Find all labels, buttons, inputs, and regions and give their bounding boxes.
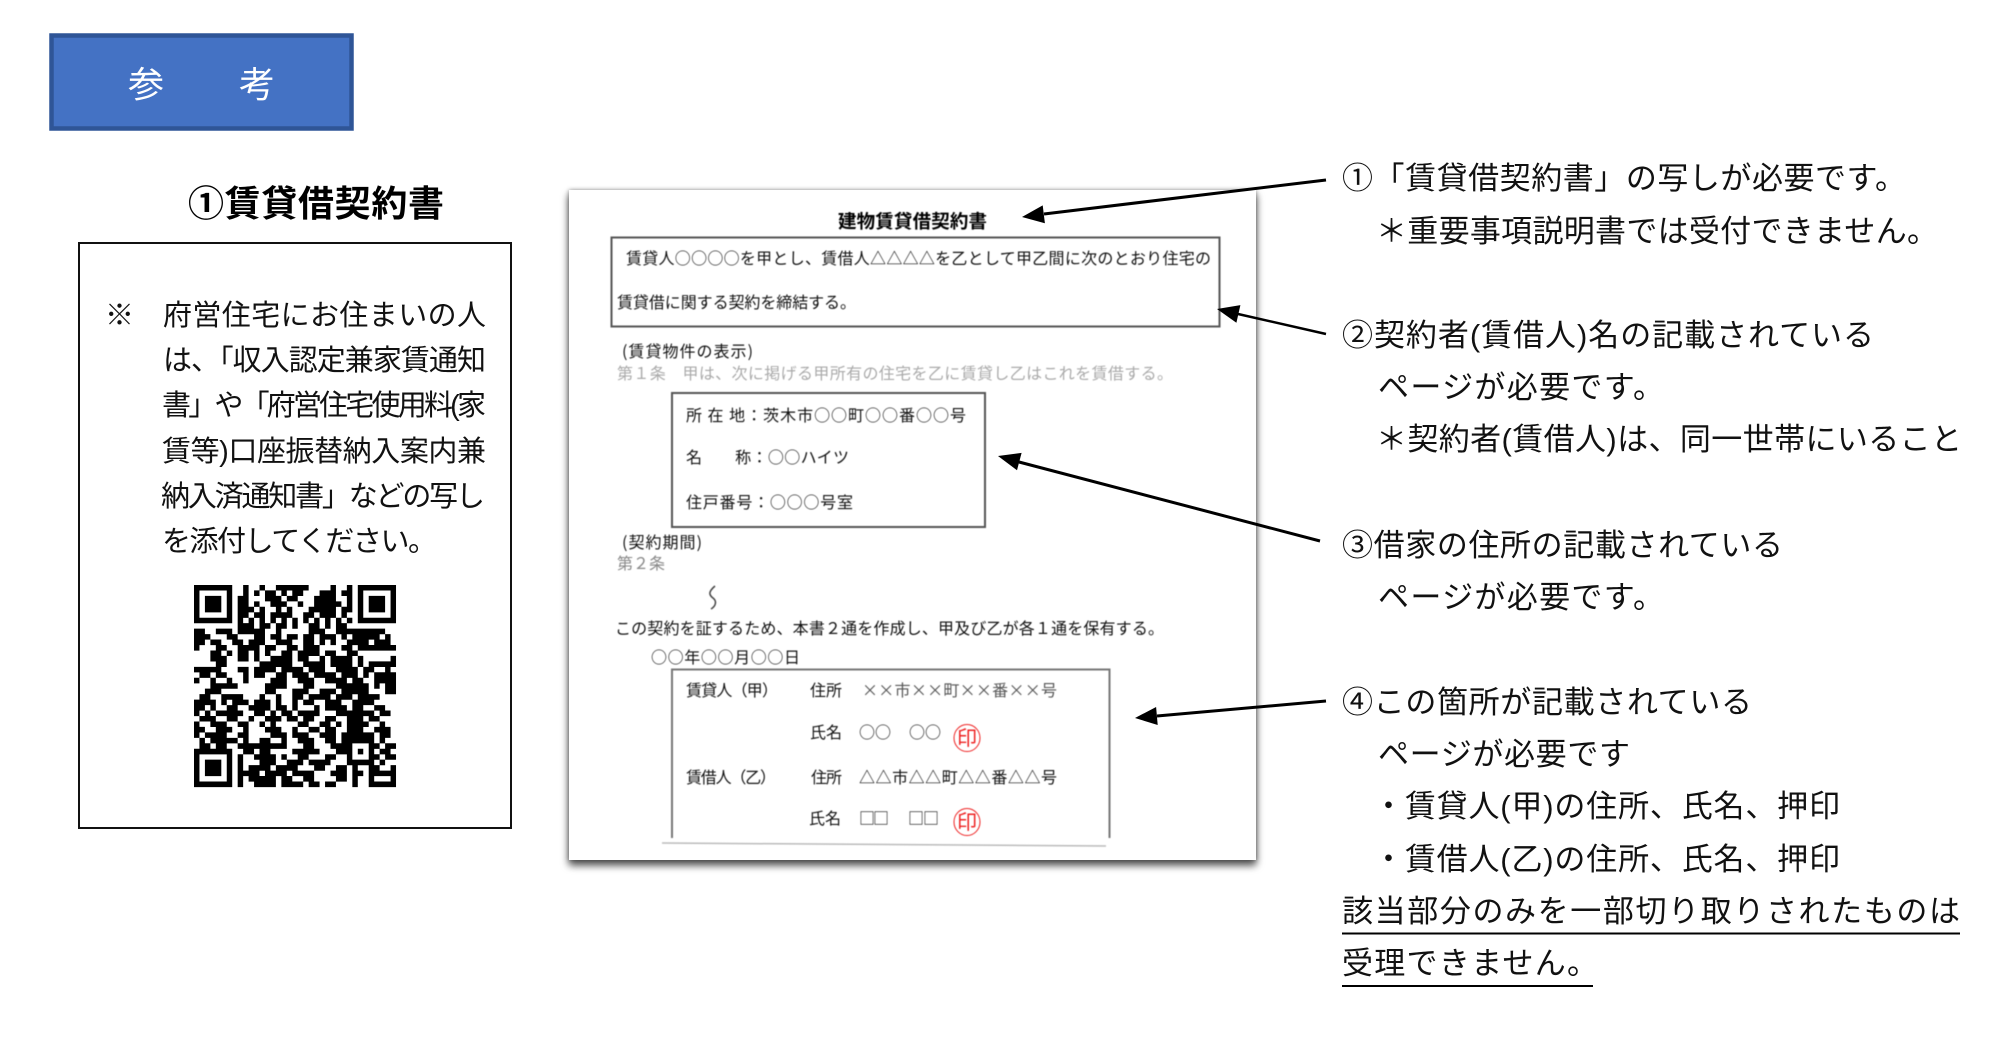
document box: signatures: □□ — [908, 805, 939, 829]
document article 1 — [617, 338, 1173, 384]
document box: signatures: 氏名 — [810, 719, 842, 743]
document box: parties clause: 賃貸借に関する契約を締結する。 — [617, 289, 856, 313]
document box: parties clause — [612, 238, 1220, 326]
document box: signatures: ○○ — [859, 719, 891, 743]
arrow 4 — [1135, 701, 1326, 725]
note text: 府営住宅にお住まいの人 — [163, 299, 486, 332]
callout 3: page with rental address: ページが必要です。 — [1378, 580, 1664, 615]
document box: signatures — [662, 670, 1110, 846]
callout 2: page with contractor name: ＊契約者(賃借人)は、同一世帯にいること — [1376, 422, 1962, 457]
underlined warning — [1342, 894, 1960, 986]
callout 2: page with contractor name: ②契約者(賃借人)名の記載されている — [1342, 318, 1874, 353]
note text: を添付してください。 — [162, 525, 437, 558]
document article 2: (契約期間) — [622, 529, 702, 553]
seal 1: 印 — [957, 722, 977, 751]
callout 1: lease contract copy required: ①「賃貸借契約書」の写しが必要です。 — [1342, 161, 1906, 196]
arrow 2 — [1217, 305, 1326, 334]
note text — [105, 299, 486, 558]
callout 4: page with this section: ページが必要です — [1378, 737, 1630, 772]
badge: 参考 heading — [52, 36, 352, 128]
QR code — [194, 588, 396, 784]
document box: property details: 所 在 地：茨木市○○町○○番○○号 — [686, 402, 966, 426]
callout 4: page with this section — [1342, 685, 1840, 877]
document box: property details: 名 称：○○ハイツ — [686, 444, 849, 468]
badge: 参考 heading: 考 — [239, 64, 275, 105]
document box: signatures: △△市△△町△△番△△号 — [859, 764, 1057, 788]
panel: note with QR code — [79, 243, 511, 828]
document box: signatures: □□ — [859, 805, 889, 829]
document title: 建物賃貸借契約書 — [838, 208, 987, 234]
note text: 書」や「府営住宅使用料(家 — [162, 389, 486, 422]
callout 1: lease contract copy required — [1342, 161, 1938, 249]
document box: signatures: 賃借人（乙） — [686, 764, 776, 788]
document box: signatures: 賃貸人（甲） — [686, 677, 778, 701]
document box: signatures: ××市××町××番××号 — [862, 677, 1057, 701]
seal 2: 印 — [957, 806, 977, 835]
document box: signatures: 氏名 — [809, 805, 841, 829]
document box: property details: 住戸番号：○○○号室 — [686, 489, 853, 513]
document article 2: ○○年○○月○○日 — [651, 644, 800, 668]
document article 2: 第２条 — [617, 550, 665, 574]
callout 2: page with contractor name — [1342, 318, 1962, 457]
document article 2: この契約を証するため、本書２通を作成し、甲及び乙が各１通を保有する。 — [615, 615, 1164, 639]
note text: 納入済通知書」などの写し — [161, 480, 485, 513]
document box: signatures: ○○ — [909, 719, 941, 743]
callout 3: page with rental address — [1342, 528, 1783, 615]
underlined warning: 受理できません。 — [1342, 946, 1598, 981]
callout 4: page with this section: ・賃借人(乙)の住所、氏名、押印 — [1373, 842, 1840, 877]
heading: 賃貸借契約書: ①賃貸借契約書 — [188, 183, 444, 224]
callout 1: lease contract copy required: ＊重要事項説明書では受付できません。 — [1376, 214, 1938, 249]
document article 2 — [615, 529, 1164, 668]
document page — [569, 190, 1256, 860]
document box: property details — [672, 393, 985, 527]
note text: は、「収入認定兼家賃通知 — [163, 344, 486, 377]
callout 4: page with this section: ④この箇所が記載されている — [1342, 685, 1752, 720]
callout 3: page with rental address: ③借家の住所の記載されている — [1342, 528, 1783, 563]
badge: 参考 heading: 参 — [128, 64, 164, 105]
document box: signatures: 住所 — [810, 677, 842, 701]
arrow 1 — [1022, 180, 1326, 223]
callout 2: page with contractor name: ページが必要です。 — [1378, 370, 1664, 405]
document box: parties clause: 賃貸人○○○○を甲とし、賃借人△△△△を乙として甲乙間に次のとおり住宅の — [626, 245, 1211, 269]
note text: ※ — [105, 300, 134, 332]
callout 4: page with this section: ・賃貸人(甲)の住所、氏名、押印 — [1373, 789, 1840, 824]
document box: signatures: 住所 — [811, 764, 842, 788]
document article 1: 第１条 甲は、次に掲げる甲所有の住宅を乙に賃貸し乙はこれを賃借する。 — [617, 360, 1173, 384]
document article 1: (賃貸物件の表示) — [622, 338, 753, 362]
panel: sample lease contract document — [569, 190, 1256, 860]
note text: 賃等)口座振替納入案内兼 — [162, 435, 486, 468]
arrow 3 — [998, 453, 1320, 541]
document contents — [612, 208, 1220, 846]
underlined warning: 該当部分のみを一部切り取りされたものは — [1342, 894, 1960, 929]
